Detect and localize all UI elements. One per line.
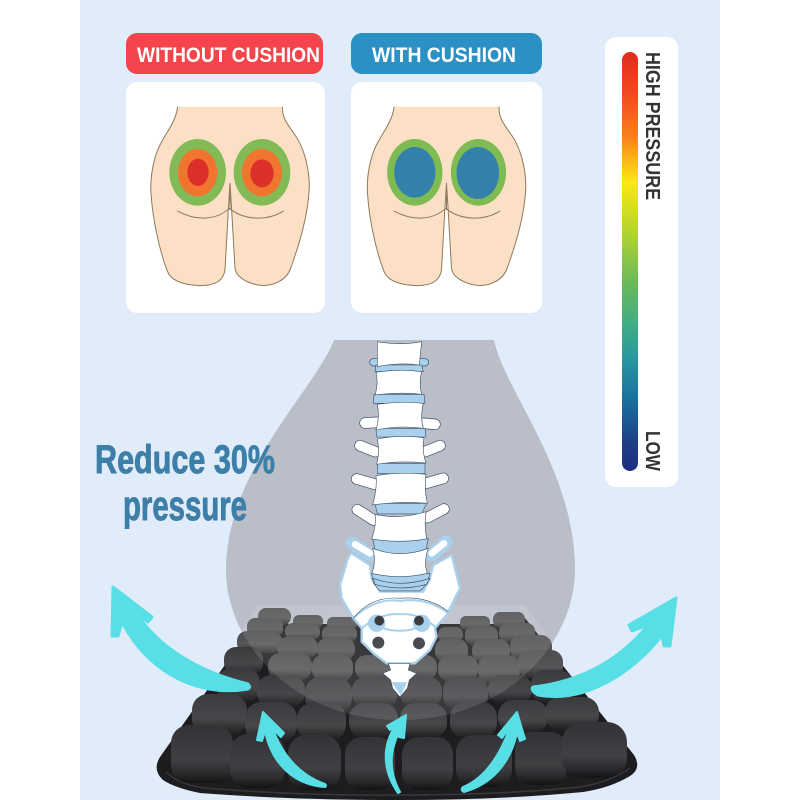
heading: without cushion: WITHOUT CUSHION bbox=[137, 44, 320, 67]
card: pressure map without cushion bbox=[126, 82, 325, 313]
heading: with cushion: WITH CUSHION bbox=[372, 44, 516, 67]
illustration: right pressure zones bbox=[451, 139, 506, 206]
heading: without cushion bbox=[126, 33, 323, 74]
sacrum bbox=[340, 553, 460, 663]
callout: reduce 30% pressure: Reduce 30% bbox=[95, 438, 275, 482]
vertebrae bbox=[372, 342, 430, 588]
arrows: airflow bbox=[112, 587, 676, 793]
background panel bbox=[80, 0, 720, 800]
callout: reduce 30% pressure: pressure bbox=[123, 482, 247, 529]
illustration: body outline bbox=[367, 107, 526, 286]
panel: with cushion bbox=[351, 33, 542, 313]
grey body silhouette bbox=[226, 340, 575, 720]
vertebra processes bbox=[352, 362, 446, 555]
card: pressure map with cushion bbox=[351, 82, 542, 313]
callout: reduce 30% pressure bbox=[95, 438, 275, 529]
legend: pressure scale bbox=[605, 37, 678, 487]
translucent body overlay on cushion bbox=[242, 608, 552, 720]
arrow: upper left bbox=[112, 587, 250, 691]
illustration: right pressure zones bbox=[234, 139, 290, 206]
panel: without cushion bbox=[126, 33, 325, 313]
illustration: body outline bbox=[151, 107, 309, 286]
arrow: bottom centre bbox=[386, 715, 406, 793]
colour scale bar bbox=[622, 52, 638, 471]
arrow: upper right bbox=[532, 598, 676, 697]
intervertebral discs bbox=[372, 365, 430, 591]
label: high pressure: HIGH PRESSURE bbox=[641, 52, 663, 200]
label: low: LOW bbox=[641, 431, 663, 471]
illustration: left pressure zones bbox=[169, 139, 226, 206]
illustration: left pressure zones bbox=[387, 139, 442, 206]
illustration: spine bbox=[340, 342, 460, 697]
heading: with cushion bbox=[351, 33, 542, 74]
coccyx bbox=[383, 663, 417, 697]
arrow: bottom right bbox=[462, 712, 525, 792]
cushion bbox=[157, 608, 637, 800]
arrow: bottom left bbox=[257, 712, 326, 787]
